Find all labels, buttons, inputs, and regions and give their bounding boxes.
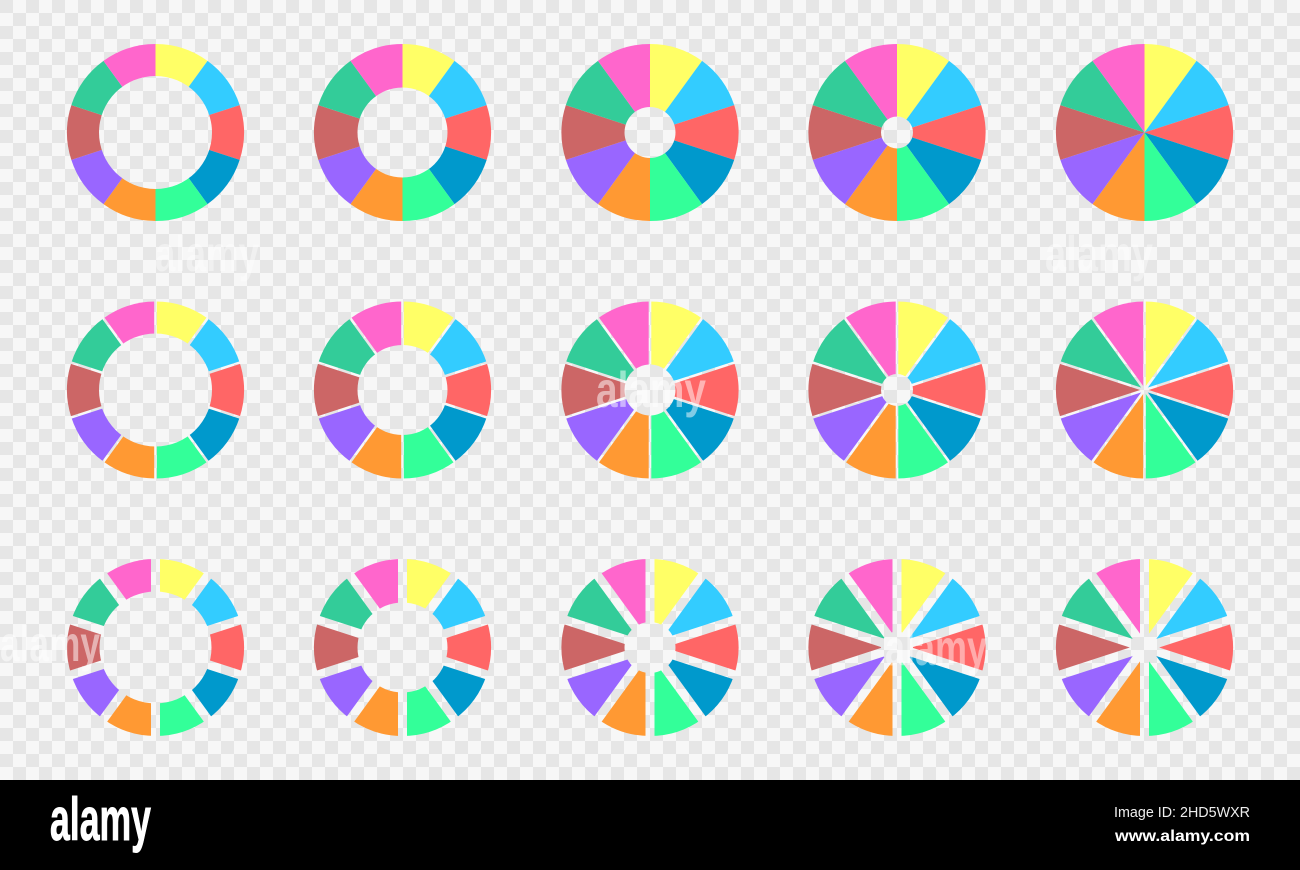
watermark: upper right: alamy [1045, 226, 1153, 282]
watermark: lower right: alamy [885, 620, 987, 676]
website: www.alamy.com [1114, 828, 1250, 845]
row 2: pie chart, thin gaps [1056, 302, 1233, 478]
image id: Image ID: 2HD5WXR [1114, 804, 1250, 821]
row 2: donut, thin gaps, thick ring [561, 302, 739, 478]
row 3: donut, wide gaps, medium ring [314, 559, 491, 736]
row 3: donut, wide gaps, small hole [808, 559, 986, 736]
watermark: upper left: alamy [155, 226, 259, 282]
alamy logo: alamy [50, 786, 151, 853]
row 2: donut, thin gaps, thin ring [67, 302, 244, 478]
row 1: donut, no gaps, small hole [808, 44, 986, 221]
row 2: donut, thin gaps, medium ring [314, 302, 491, 478]
watermark: lower left: alamy [0, 616, 100, 672]
row 1: donut, no gaps, medium ring [314, 44, 491, 221]
watermark: center: alamy [596, 362, 706, 418]
row 3: donut, wide gaps, thin ring [67, 559, 244, 736]
row 1: pie chart, no gaps [1056, 44, 1233, 221]
row 3: donut, wide gaps, thick ring [561, 559, 739, 736]
row 1: donut, no gaps, thin ring [67, 44, 244, 221]
row 3: pie chart, wide gaps [1056, 559, 1233, 736]
footer bar [0, 780, 1300, 870]
row 2: donut, thin gaps, small hole [808, 302, 986, 478]
row 1: donut, no gaps, thick ring [561, 44, 739, 221]
